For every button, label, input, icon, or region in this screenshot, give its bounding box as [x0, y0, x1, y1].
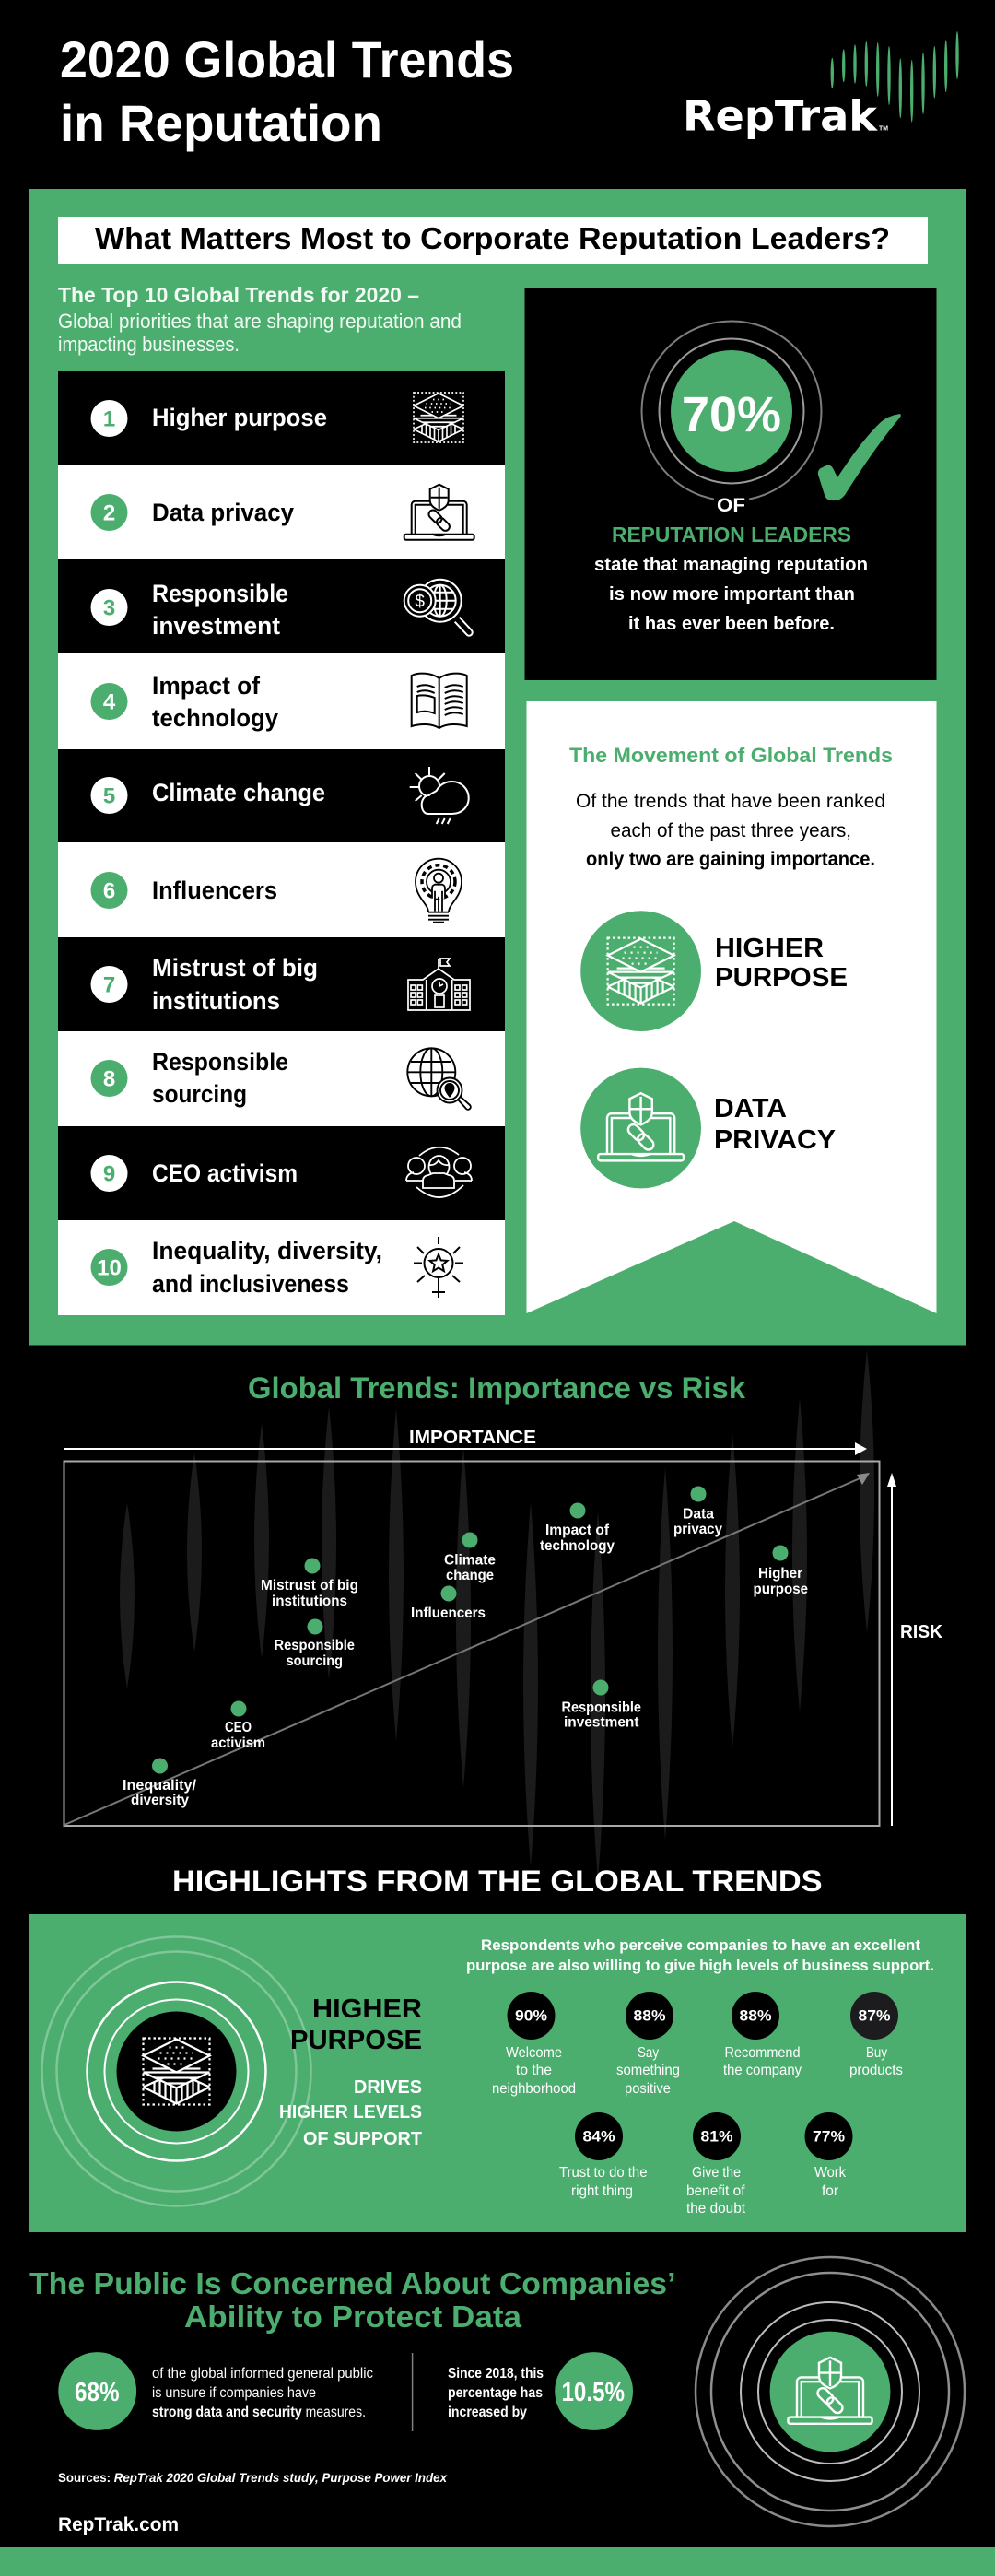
point: responsible investment: investment: [564, 1715, 639, 1731]
icon: data privacy badge: [580, 1068, 701, 1188]
text: 68% description: strong data and security measures.: [152, 2405, 366, 2420]
row 1: higher purpose: Higher purpose: [152, 404, 327, 431]
stat: 84% trust to do the right thing: Trust to do the: [559, 2165, 647, 2181]
stat: 90% welcome to the neighborhood: Welcome: [506, 2045, 562, 2061]
heading bar: What Matters Most to Corporate Reputation Leaders?: [95, 221, 890, 255]
background spindles: [120, 1349, 874, 1880]
point: inequality/diversity: [123, 1759, 197, 1808]
row 7: mistrust of big institutions: [58, 937, 505, 1031]
movement description: only two are gaining importance.: [586, 849, 875, 870]
stat: 87% buy products: products: [849, 2063, 903, 2078]
text: 68% description: is unsure if companies have: [152, 2385, 316, 2401]
row 1: higher purpose: 1: [103, 407, 115, 431]
text: 68% description: of the global informed general public: [152, 2366, 373, 2382]
stat: 81% give the benefit of the doubt: 81%: [700, 2127, 733, 2146]
icon: check mark: [818, 414, 901, 500]
point: climate change: change: [446, 1568, 494, 1583]
arrow: trend diagonal: [64, 1473, 870, 1825]
movement description: each of the past three years,: [610, 820, 851, 841]
heading: public concern: The Public Is Concerned About Companies’: [29, 2266, 676, 2300]
divider: [412, 2353, 414, 2431]
text: since 2018: percentage has: [448, 2385, 543, 2401]
row 4: impact of technology: technology: [152, 704, 278, 732]
ring badge: 70%: 70%: [682, 387, 781, 442]
title: 2020 Global Trends: [60, 30, 514, 88]
stat: 68%: 68%: [75, 2378, 120, 2407]
point: higher purpose: purpose: [754, 1582, 808, 1597]
statement text: it has ever been before.: [628, 614, 835, 634]
stat: 77% work for: [805, 2112, 853, 2199]
chart: importance vs risk: [64, 1428, 943, 1826]
stat: 84% trust to do the right thing: [559, 2112, 647, 2199]
stat: 87% buy products: 87%: [859, 2007, 890, 2024]
data privacy label: PRIVACY: [714, 1125, 836, 1155]
stat: 81% give the benefit of the doubt: benefit of: [686, 2183, 745, 2199]
point: mistrust of big institutions: Mistrust of big: [261, 1578, 358, 1594]
stat: 84% trust to do the right thing: 84%: [582, 2127, 615, 2146]
point: data privacy: Data: [683, 1506, 714, 1523]
stat: 88% say something positive: positive: [625, 2081, 671, 2097]
row 6: influencers: 6: [103, 879, 115, 903]
chart title: Global Trends: Importance vs Risk: [248, 1371, 745, 1405]
point: impact of technology: Impact of: [545, 1523, 610, 1538]
point: inequality/diversity: Inequality/: [123, 1778, 197, 1794]
movement description: Of the trends that have been ranked: [576, 791, 885, 812]
row 3: responsible investment: $: [415, 593, 425, 612]
text: 68% description: [152, 2366, 373, 2420]
statement text: [594, 495, 868, 634]
point: impact of technology: technology: [540, 1538, 615, 1554]
ring badge: 70%: [641, 321, 822, 501]
text: since 2018: increased by: [448, 2405, 527, 2420]
row 9: CEO activism: 9: [103, 1161, 115, 1187]
logo: RepTrak: RepTrak: [683, 92, 878, 140]
stat: 77% work for: for: [822, 2183, 838, 2199]
stat: 90% welcome to the neighborhood: 90%: [515, 2007, 547, 2024]
panel: movement of global trends: [527, 701, 936, 1313]
stat: 87% buy products: [849, 1992, 903, 2078]
ring badge: higher purpose: [42, 1937, 311, 2206]
stat: 10.5%: 10.5%: [562, 2378, 625, 2407]
respondents text: Respondents who perceive companies to have an excellent: [481, 1936, 920, 1954]
point: influencers: Influencers: [411, 1606, 486, 1621]
row 3: responsible investment: 3: [103, 595, 115, 621]
stat: 90% welcome to the neighborhood: neighborhood: [492, 2081, 576, 2097]
respondents text: [466, 1936, 934, 1974]
point: climate change: Climate: [444, 1552, 496, 1569]
row 2: data privacy: Data privacy: [152, 499, 294, 526]
row 8: responsible sourcing: sourcing: [152, 1080, 247, 1108]
row 3: responsible investment: Responsible: [152, 580, 288, 607]
heading bar: [58, 217, 928, 264]
stat: 81% give the benefit of the doubt: Give the: [692, 2165, 741, 2181]
top 10 intro text: impacting businesses.: [58, 333, 240, 356]
row 3: responsible investment: investment: [152, 612, 280, 640]
data privacy label: DATA: [714, 1094, 787, 1123]
icon: higher purpose badge: [580, 911, 701, 1031]
stat: 88% recommend the company: the company: [723, 2063, 802, 2078]
point: mistrust of big institutions: [261, 1558, 358, 1609]
row 4: impact of technology: Impact of: [152, 672, 261, 700]
sources: Sources: RepTrak 2020 Global Trends study, Purpose Power Index: [58, 2470, 448, 2485]
top 10 intro text: The Top 10 Global Trends for 2020 –: [58, 283, 419, 307]
row 3: responsible investment: [58, 559, 505, 653]
point: responsible sourcing: Responsible: [275, 1638, 355, 1653]
stat: 88% say something positive: [616, 1992, 680, 2097]
point: CEO activism: [211, 1701, 265, 1751]
point: data privacy: privacy: [673, 1522, 722, 1537]
row 7: mistrust of big institutions: institutions: [152, 987, 280, 1015]
row 1: higher purpose: [58, 371, 505, 465]
panel: what matters most: [29, 189, 966, 1346]
point: responsible investment: [562, 1679, 641, 1731]
higher purpose heading: HIGHER: [312, 1994, 422, 2024]
stat: 87% buy products: Buy: [866, 2045, 887, 2061]
higher purpose label: PURPOSE: [715, 963, 848, 993]
row 6: influencers: [58, 842, 505, 937]
logo: RepTrak: [683, 31, 959, 140]
website link: RepTrak.com: [58, 2514, 179, 2535]
row 6: influencers: Influencers: [152, 876, 277, 904]
row 2: data privacy: 2: [103, 501, 115, 525]
row 8: responsible sourcing: Responsible: [152, 1048, 288, 1076]
point: responsible sourcing: sourcing: [287, 1653, 343, 1669]
arrow: importance axis: [64, 1442, 867, 1455]
title: [60, 30, 514, 152]
statement text: is now more important than: [609, 584, 855, 605]
movement heading: The Movement of Global Trends: [569, 744, 893, 767]
point: inequality/diversity: diversity: [131, 1793, 189, 1808]
point: responsible sourcing: [275, 1618, 355, 1669]
text: since 2018: Since 2018, this: [448, 2366, 544, 2382]
heading: highlights: HIGHLIGHTS FROM THE GLOBAL TRENDS: [172, 1864, 823, 1898]
row 9: CEO activism: CEO activism: [152, 1159, 298, 1187]
point: mistrust of big institutions: institutions: [272, 1594, 347, 1609]
row 10: inequality, diversity, and inclusiveness: [58, 1220, 505, 1315]
stat: 10.5%: [555, 2352, 633, 2430]
panel: 70% of reputation leaders: [525, 288, 936, 680]
stat: 88% recommend the company: Recommend: [724, 2045, 800, 2061]
title: in Reputation: [60, 94, 382, 152]
stat: 84% trust to do the right thing: right thing: [571, 2183, 633, 2199]
stat: 88% say something positive: 88%: [634, 2007, 665, 2024]
point: influencers: [411, 1585, 486, 1621]
footer band: [0, 2547, 995, 2576]
row 8: responsible sourcing: [58, 1031, 505, 1126]
row 5: climate change: [58, 749, 505, 842]
logo: RepTrak: TM: [879, 125, 888, 133]
chart frame: [64, 1462, 879, 1826]
row 5: climate change: 5: [103, 783, 115, 809]
drives higher levels of support: HIGHER LEVELS: [279, 2102, 422, 2123]
point: impact of technology: [540, 1502, 615, 1554]
stat: 81% give the benefit of the doubt: the doubt: [686, 2201, 746, 2217]
drives higher levels of support: [279, 2077, 422, 2149]
movement description: [576, 791, 885, 870]
row 8: responsible sourcing: 8: [103, 1067, 115, 1091]
ring badge: data privacy: [696, 2257, 965, 2526]
row 7: mistrust of big institutions: 7: [103, 973, 115, 997]
row 4: impact of technology: 4: [103, 689, 116, 715]
data privacy label: [714, 1094, 836, 1155]
statement text: state that managing reputation: [594, 555, 868, 575]
axis label: importance: IMPORTANCE: [409, 1428, 536, 1448]
drives higher levels of support: OF SUPPORT: [303, 2129, 422, 2149]
higher purpose heading: [290, 1994, 422, 2055]
drives higher levels of support: DRIVES: [354, 2077, 422, 2098]
row 10: inequality, diversity, and inclusiveness: 10: [97, 1255, 122, 1281]
heading: public concern: [29, 2266, 676, 2334]
panel: higher purpose highlights: [29, 1914, 966, 2232]
higher purpose label: HIGHER: [715, 934, 824, 963]
stat: 90% welcome to the neighborhood: to the: [516, 2063, 552, 2078]
row 4: impact of technology: [58, 653, 505, 749]
stat: 88% recommend the company: [723, 1992, 802, 2078]
point: data privacy: [673, 1486, 722, 1537]
stat: 68%: [58, 2352, 136, 2430]
stat: 81% give the benefit of the doubt: [686, 2112, 746, 2217]
stat: 88% say something positive: Say: [638, 2045, 659, 2061]
point: CEO activism: CEO: [225, 1720, 252, 1735]
point: responsible investment: Responsible: [562, 1700, 641, 1716]
stat: 88% recommend the company: 88%: [739, 2007, 772, 2024]
stat: 77% work for: Work: [814, 2165, 846, 2181]
point: higher purpose: Higher: [758, 1566, 802, 1582]
statement text: OF: [717, 495, 745, 516]
top 10 intro text: Global priorities that are shaping reputation and: [58, 310, 462, 333]
point: CEO activism: activism: [211, 1735, 265, 1751]
point: higher purpose: [754, 1545, 808, 1597]
higher purpose label: [715, 934, 848, 993]
arrow: risk axis: [887, 1473, 896, 1826]
stat: 77% work for: 77%: [813, 2127, 845, 2146]
stat: 90% welcome to the neighborhood: [492, 1992, 576, 2097]
higher purpose heading: PURPOSE: [290, 2026, 422, 2055]
row 2: data privacy: [58, 465, 505, 559]
row 10: inequality, diversity, and inclusiveness: and inclusiveness: [152, 1270, 349, 1298]
statement text: REPUTATION LEADERS: [612, 523, 851, 547]
point: climate change: [444, 1532, 496, 1583]
row 10: inequality, diversity, and inclusiveness: Inequality, diversity,: [152, 1237, 382, 1264]
heading: public concern: Ability to Protect Data: [184, 2300, 522, 2334]
respondents text: purpose are also willing to give high levels of business support.: [466, 1957, 934, 1974]
stat: 88% say something positive: something: [616, 2063, 680, 2078]
top 10 intro text: [58, 283, 462, 356]
axis label: risk: RISK: [900, 1622, 943, 1642]
row 5: climate change: Climate change: [152, 779, 325, 806]
text: since 2018: [448, 2366, 544, 2420]
row 7: mistrust of big institutions: Mistrust of big: [152, 954, 318, 982]
row 9: CEO activism: [58, 1126, 505, 1220]
